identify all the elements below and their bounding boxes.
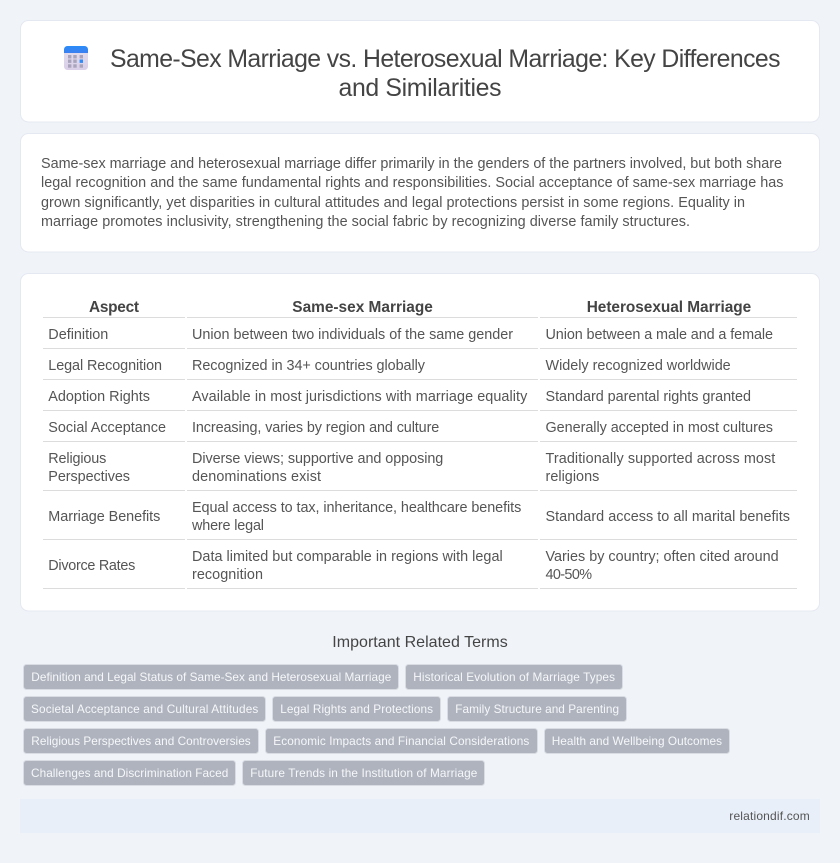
text block: summary paragraph: marriage promotes inclusivity, strengthening the social fabric by recognizing diverse family structures.	[41, 214, 690, 230]
table row: Social Acceptance: Increasing, varies by region and culture	[192, 420, 439, 436]
table row: Divorce Rates: 40-50%	[546, 567, 592, 583]
table row: Marriage Benefits	[43, 500, 797, 540]
tag	[448, 696, 626, 722]
table row: Religious Perspectives: Religious	[48, 451, 106, 467]
table row: Divorce Rates: Data limited but comparable in regions with legal	[192, 549, 503, 565]
tag: Legal Rights and Protections	[280, 702, 433, 716]
table row: Legal Recognition: Recognized in 34+ countries globally	[192, 358, 426, 374]
table row: Adoption Rights: Standard parental rights granted	[546, 389, 751, 405]
table header row	[43, 299, 797, 318]
tag	[544, 728, 730, 754]
tag: Economic Impacts and Financial Considerations	[273, 734, 529, 748]
tag: Family Structure and Parenting	[455, 702, 619, 716]
table row: Marriage Benefits: where legal	[191, 518, 264, 534]
tag	[24, 728, 258, 754]
table row: Marriage Benefits: Standard access to all marital benefits	[546, 509, 790, 525]
table row: Divorce Rates: recognition	[192, 567, 263, 583]
table row: Religious Perspectives: religions	[546, 469, 599, 485]
table row: Religious Perspectives: Diverse views; supportive and opposing	[192, 451, 443, 467]
tag	[272, 696, 440, 722]
table header row: Heterosexual Marriage	[587, 299, 752, 316]
table row: Legal Recognition: Legal Recognition	[48, 358, 162, 374]
table row: Religious Perspectives: denominations exist	[192, 469, 321, 485]
table row: Adoption Rights	[43, 389, 797, 411]
table header row: Aspect	[89, 299, 139, 316]
tag	[242, 760, 484, 786]
tag	[24, 664, 398, 690]
panel: description	[20, 134, 820, 252]
tag	[406, 664, 622, 690]
tag: Religious Perspectives and Controversies	[31, 734, 251, 748]
title: and Similarities	[338, 75, 502, 102]
table row: Divorce Rates: Divorce Rates	[48, 558, 135, 574]
table row: Social Acceptance	[43, 420, 797, 442]
table row: Divorce Rates	[43, 549, 797, 589]
table row: Divorce Rates: Varies by country; often cited around	[546, 549, 779, 565]
table row: Marriage Benefits: Equal access to tax, inheritance, healthcare benefits	[192, 500, 521, 516]
tag: Future Trends in the Institution of Marriage	[250, 766, 478, 780]
table row: Adoption Rights: Adoption Rights	[48, 389, 150, 405]
tag: Health and Wellbeing Outcomes	[552, 734, 722, 748]
table row: Marriage Benefits: Marriage Benefits	[48, 509, 160, 525]
title	[110, 46, 780, 102]
text block: summary paragraph: Same-sex marriage and heterosexual marriage differ primarily in the genders of the partners involved, but both share	[41, 156, 782, 172]
table row: Religious Perspectives: Perspectives	[48, 469, 130, 485]
tag: Challenges and Discrimination Faced	[31, 766, 228, 780]
footer	[20, 799, 820, 833]
table row: Social Acceptance: Generally accepted in most cultures	[546, 420, 773, 436]
related terms tags	[24, 664, 730, 786]
table row: Social Acceptance: Social Acceptance	[48, 420, 166, 436]
text block: summary paragraph: legal recognition and the same fundamental rights and responsibilities. Social acceptance of same-sex marriage has	[41, 175, 784, 191]
heading: Important Related Terms: Important Related Terms	[332, 634, 508, 651]
table row: Legal Recognition: Widely recognized worldwide	[546, 358, 731, 374]
table row: Definition: Union between a male and a female	[546, 327, 773, 343]
table row: Definition: Definition	[48, 327, 108, 343]
tag	[266, 728, 538, 754]
text block: summary paragraph: grown significantly, yet disparities in cultural attitudes and legal protections persist in some regions. Equality in	[41, 195, 745, 211]
title: Same-Sex Marriage vs. Heterosexual Marriage: Key Differences	[110, 46, 780, 73]
tag: Historical Evolution of Marriage Types	[413, 670, 615, 684]
table row: Legal Recognition	[43, 358, 797, 380]
text block: summary paragraph	[41, 156, 784, 230]
footer: relationdif.com	[729, 809, 810, 823]
table header row: Same-sex Marriage	[292, 299, 433, 316]
tag	[24, 760, 236, 786]
tag	[24, 696, 266, 722]
tag: Definition and Legal Status of Same-Sex and Heterosexual Marriage	[31, 670, 392, 684]
panel: comparison table	[20, 274, 820, 611]
table row: Religious Perspectives	[43, 451, 797, 491]
panel: header	[20, 20, 820, 122]
icon: calendar	[64, 46, 88, 70]
table row: Definition	[43, 327, 797, 349]
table row: Religious Perspectives: Traditionally supported across most	[546, 451, 775, 467]
table row: Definition: Union between two individuals of the same gender	[192, 327, 513, 343]
table row: Adoption Rights: Available in most jurisdictions with marriage equality	[192, 389, 528, 405]
tag: Societal Acceptance and Cultural Attitudes	[31, 702, 258, 716]
